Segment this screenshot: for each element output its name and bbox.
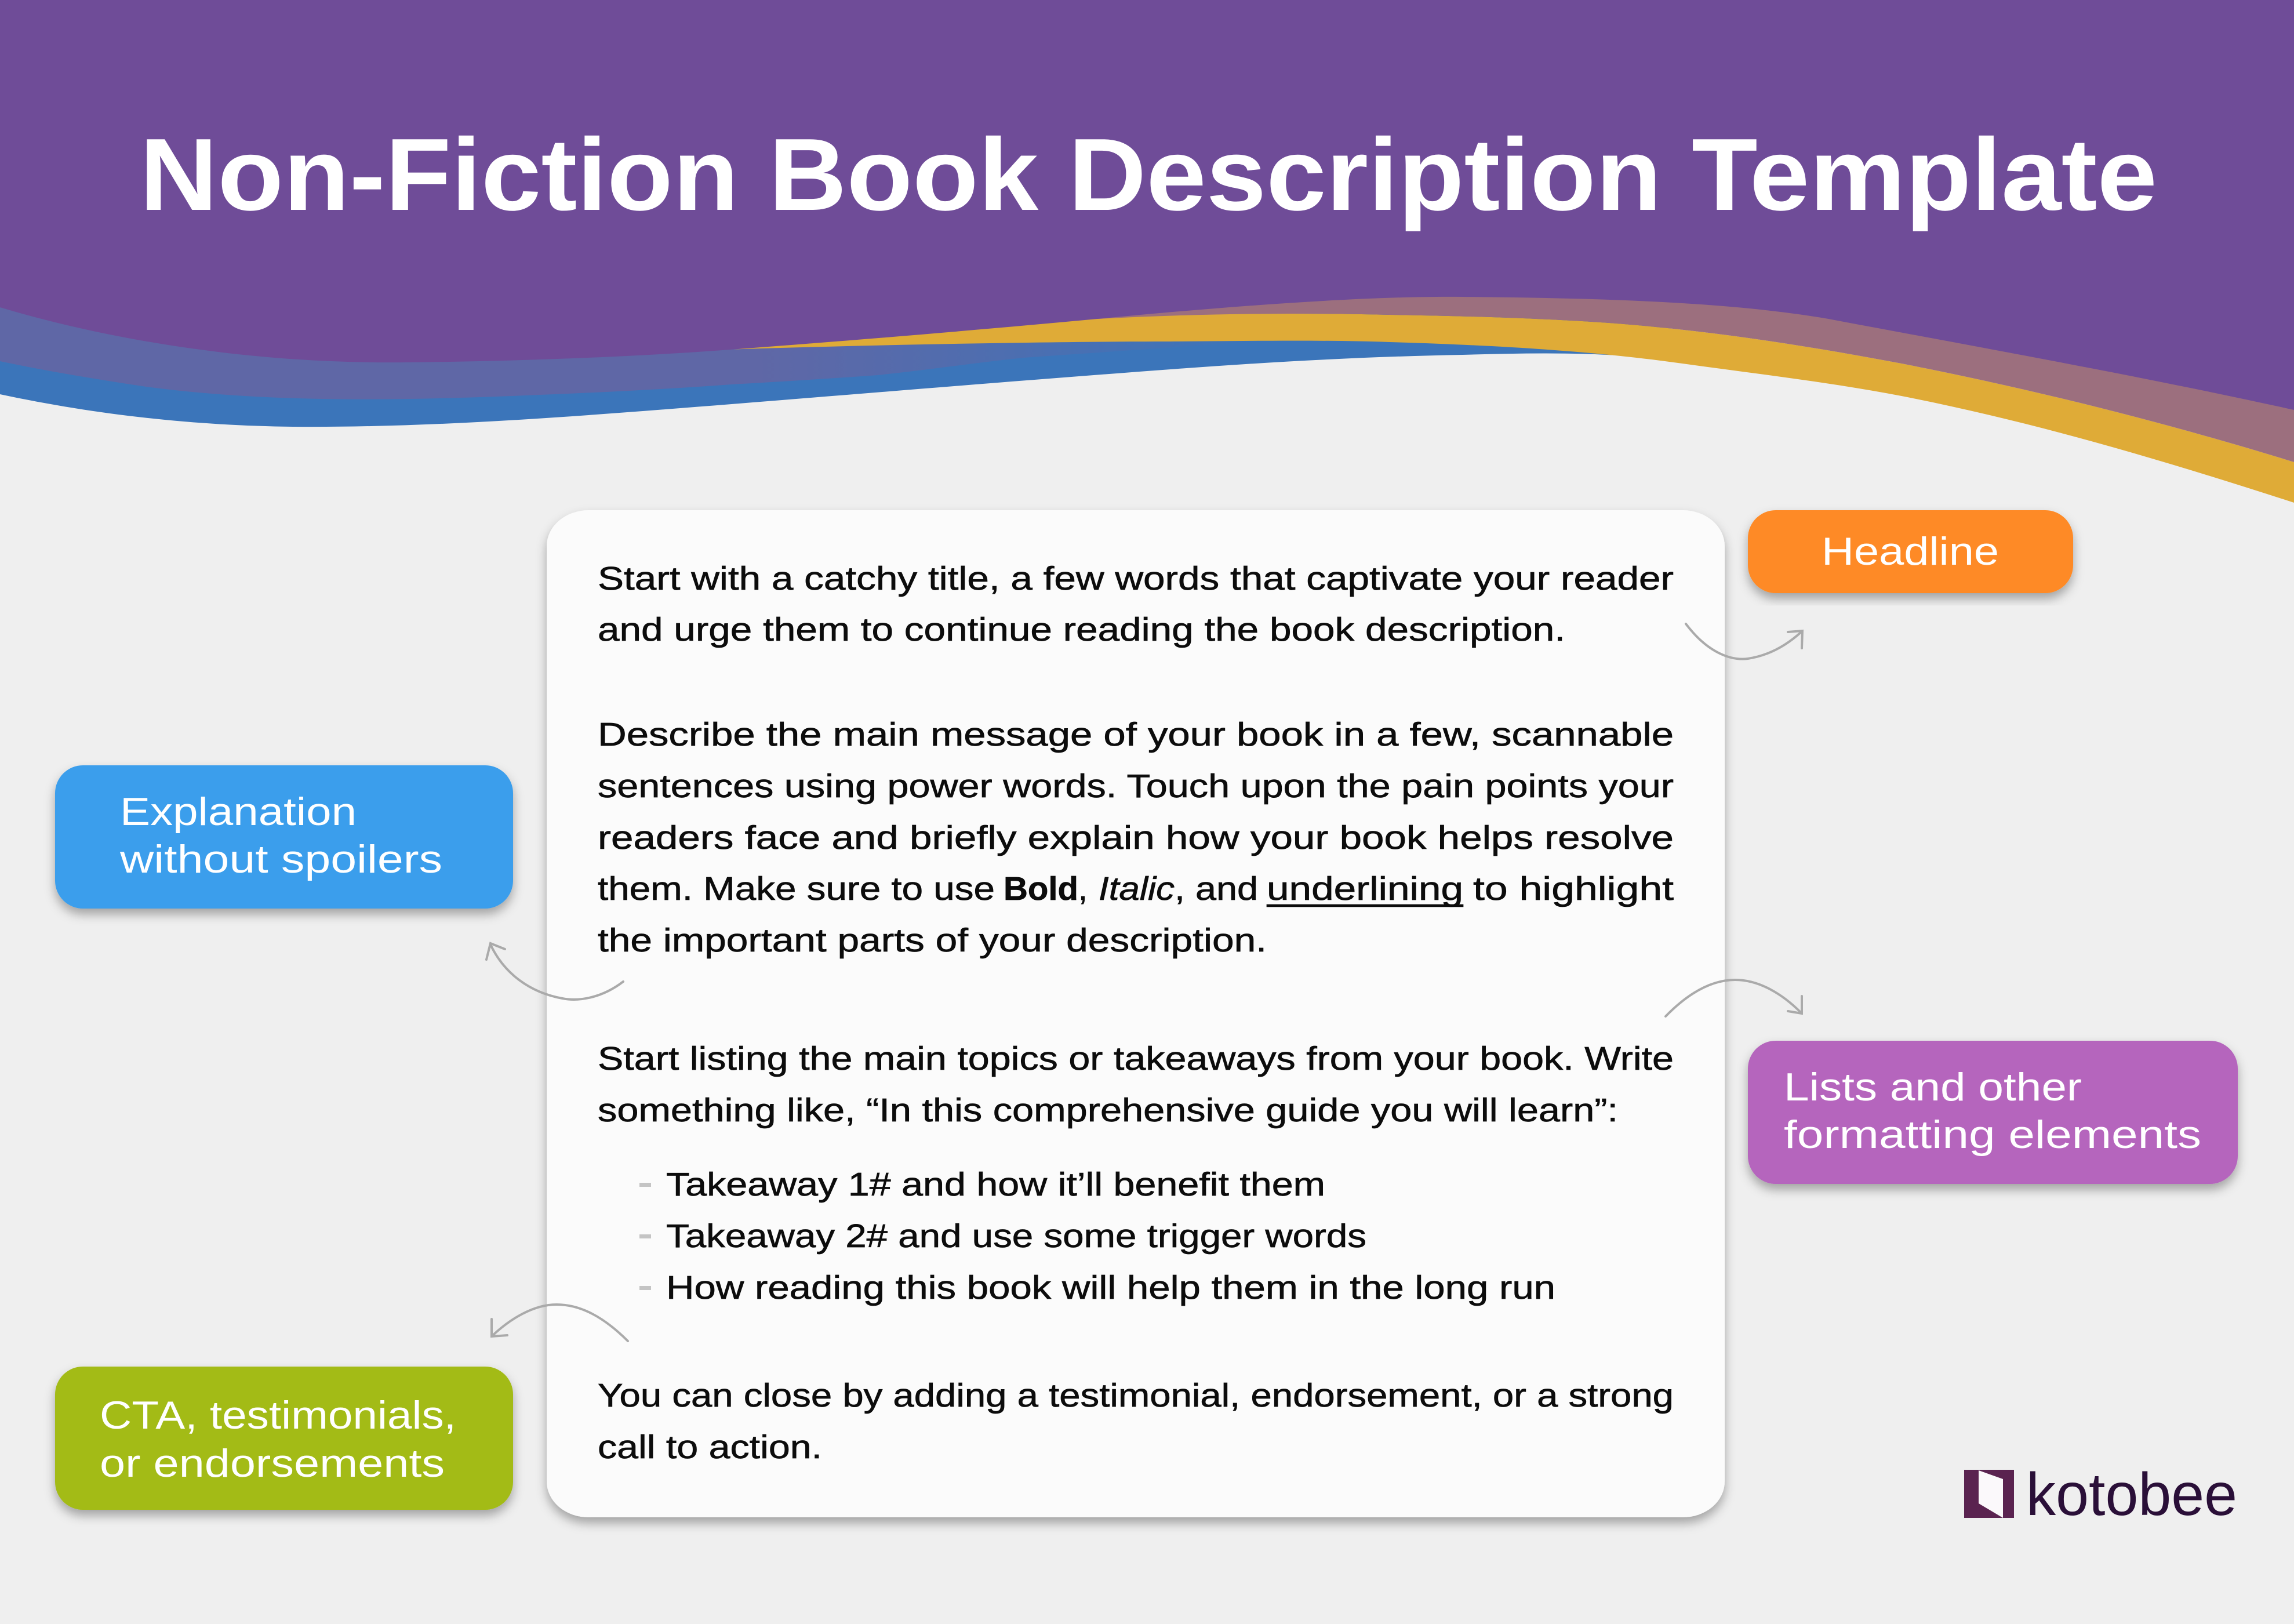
text block: explanation instructions <box>598 716 1674 959</box>
wave: mauve band <box>1097 261 2294 462</box>
text block: explanation instructions: , <box>1078 870 1088 907</box>
text block: closing instructions <box>598 1377 1674 1466</box>
arrow: to CTA <box>492 1305 628 1341</box>
callout: CTA, testimonials, or endorsements: CTA, testimonials, <box>100 1393 456 1437</box>
arrow: to Explanation <box>486 943 623 1000</box>
card background <box>547 510 1725 1517</box>
bulleted list: Takeaway 1# and how it’ll benefit them <box>666 1166 1325 1203</box>
text block: headline instructions: and urge them to continue reading the book description. <box>598 611 1565 648</box>
panel: description card <box>547 510 1725 1517</box>
bulleted list <box>639 1166 1555 1306</box>
text block: closing instructions: You can close by adding a testimonial, endorsement, or a strong <box>598 1377 1674 1414</box>
callout: Lists and other formatting elements: formatting elements <box>1784 1113 2201 1157</box>
callout: Explanation without spoilers: Explanation <box>120 790 357 834</box>
text block: closing instructions: call to action. <box>598 1429 822 1466</box>
text block: explanation instructions: , and <box>1175 870 1258 907</box>
callout: Headline <box>1748 510 2073 593</box>
text block: explanation instructions: the important parts of your description. <box>598 922 1267 959</box>
logo: kotobee <box>1964 1461 2237 1528</box>
text block: headline instructions <box>598 560 1674 648</box>
title: Non-Fiction Book Description Template <box>140 117 2157 232</box>
text block: takeaways intro <box>598 1040 1674 1129</box>
text block: headline instructions: Start with a catchy title, a few words that captivate your reader <box>598 560 1674 597</box>
callout: Lists and other formatting elements <box>1748 1041 2238 1184</box>
text block: explanation instructions: to highlight <box>1473 870 1674 907</box>
text block: explanation instructions: readers face and briefly explain how your book helps resolve <box>598 819 1674 856</box>
callout: CTA, testimonials, or endorsements <box>55 1367 513 1510</box>
text block: explanation instructions: Italic <box>1099 870 1175 907</box>
callout: Lists and other formatting elements: Lists and other <box>1784 1065 2082 1109</box>
wave: yellow band <box>724 314 2294 503</box>
wave: purple header <box>0 0 2294 410</box>
wave: muted blue band <box>0 0 1333 399</box>
callout: Headline: Headline <box>1822 529 1999 573</box>
header wave banner <box>0 0 2294 503</box>
arrow: to Headline <box>1686 624 1802 659</box>
callout: Explanation without spoilers <box>55 765 513 909</box>
text block: explanation instructions: sentences using power words. Touch upon the pain points your <box>598 768 1674 805</box>
icon: book mark <box>1964 1470 2014 1518</box>
wave: blue band <box>0 0 1670 427</box>
text block: takeaways intro: Start listing the main topics or takeaways from your book. Write <box>598 1040 1674 1077</box>
callout: Explanation without spoilers: without spoilers <box>119 837 442 881</box>
text block: explanation instructions: Bold <box>1004 870 1078 907</box>
bulleted list: Takeaway 2# and use some trigger words <box>666 1218 1366 1255</box>
arrow: to Lists <box>1666 980 1802 1016</box>
bulleted list: How reading this book will help them in the long run <box>666 1269 1555 1306</box>
text block: explanation instructions: underlining <box>1267 870 1463 907</box>
text block: explanation instructions: Describe the main message of your book in a few, scannable <box>598 716 1674 753</box>
text block: takeaways intro: something like, “In this comprehensive guide you will learn”: <box>598 1092 1618 1129</box>
logo wordmark: kotobee <box>2026 1461 2237 1528</box>
callout: CTA, testimonials, or endorsements: or endorsements <box>100 1441 445 1485</box>
text block: explanation instructions: them. Make sure to use <box>598 870 995 907</box>
